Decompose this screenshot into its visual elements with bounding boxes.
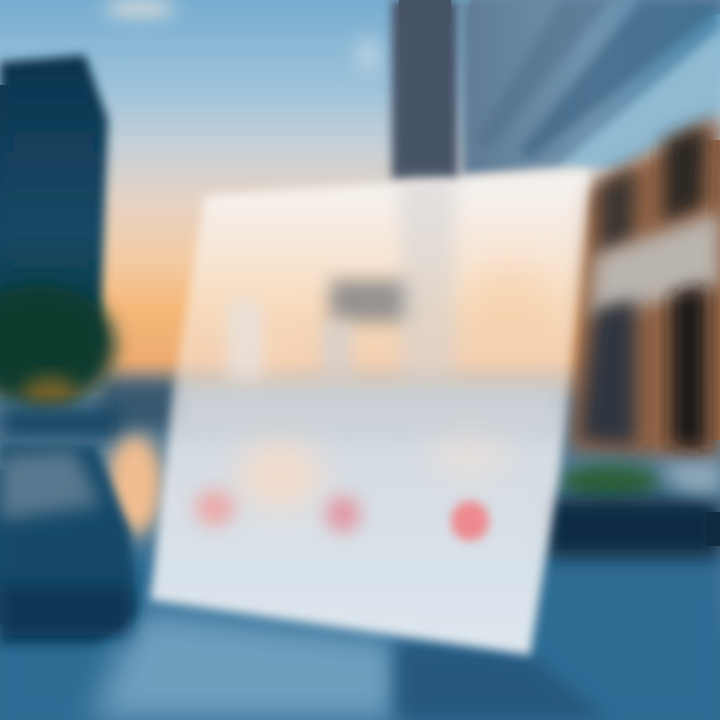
right building lower facade — [570, 115, 720, 460]
panel: vertical columns — [228, 180, 455, 380]
panel: header block — [330, 280, 410, 322]
tree and waterfront — [0, 285, 180, 535]
panel: middle grey band — [180, 388, 555, 430]
translucent infographic panel — [150, 170, 590, 655]
icon: right red marker — [451, 501, 489, 541]
right building upper facade — [462, 0, 720, 175]
panel: sunset glow reflections — [225, 265, 550, 510]
dark planter band — [545, 460, 720, 558]
ground — [0, 555, 720, 720]
left building — [0, 55, 108, 345]
car — [0, 445, 138, 645]
clouds — [104, 0, 380, 73]
tall dark pillar — [392, 0, 458, 180]
icon: left red marker — [195, 490, 235, 526]
hedge — [560, 464, 660, 500]
icon: middle red marker — [326, 496, 360, 532]
